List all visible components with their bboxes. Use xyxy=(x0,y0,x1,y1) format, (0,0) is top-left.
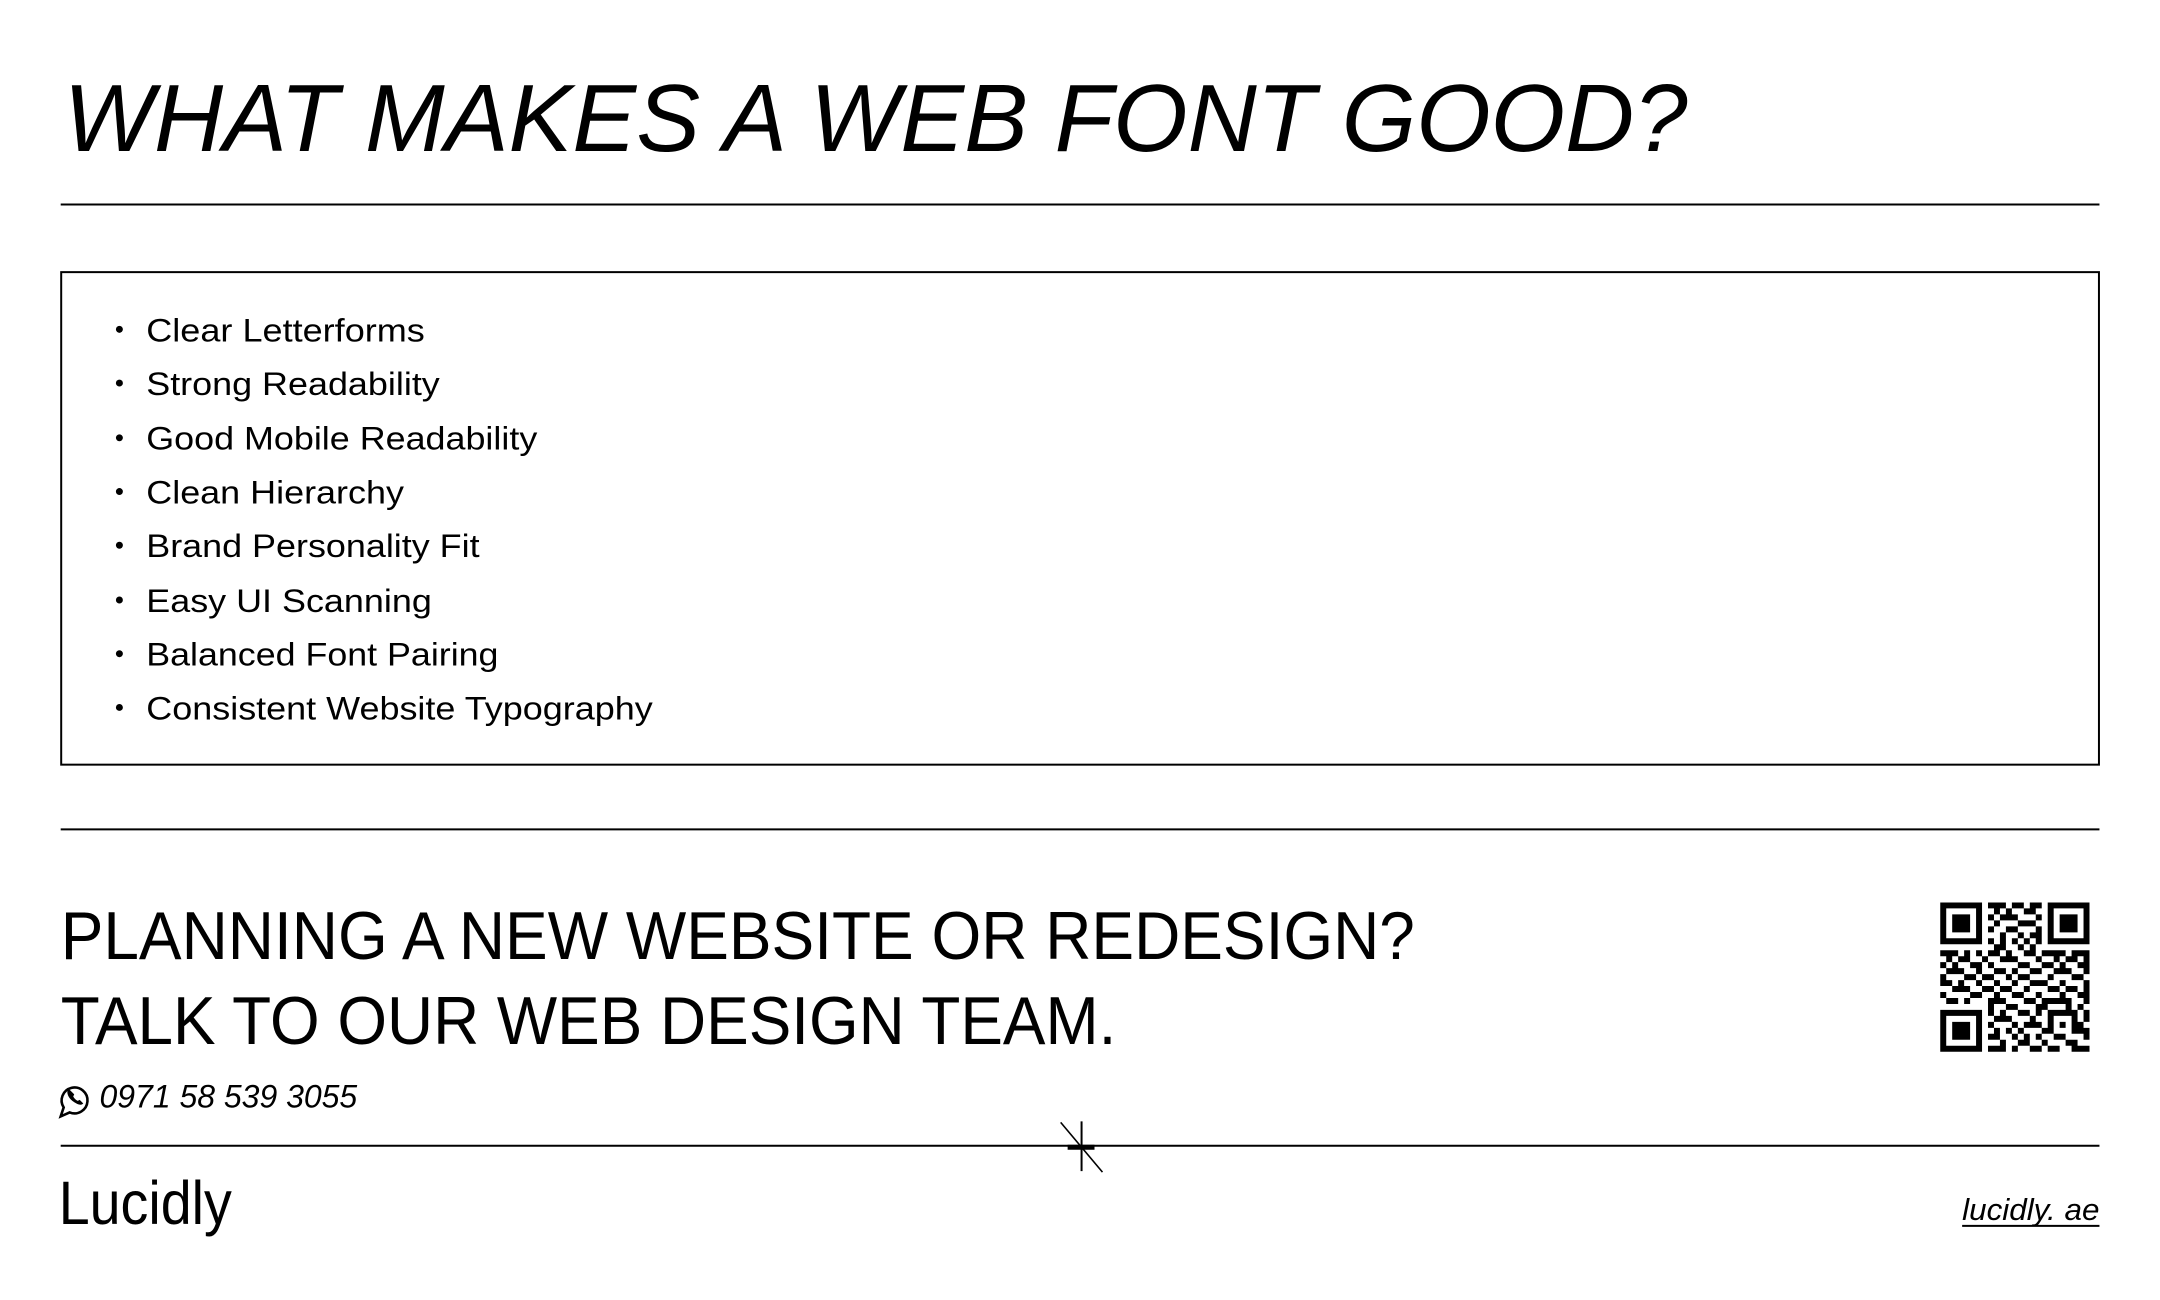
bullet list: Good Mobile Readability xyxy=(146,420,538,457)
bullet list: Consistent Website Typography xyxy=(146,689,653,726)
call to action heading: PLANNING A NEW WEBSITE OR REDESIGN? xyxy=(61,899,1415,974)
bullet list: Easy UI Scanning xyxy=(146,582,432,619)
bullet list: Clear Letterforms xyxy=(146,311,425,348)
logo: Lucidly: Lucidly xyxy=(59,1169,233,1237)
icon: cross marker xyxy=(1061,1121,1102,1172)
bullet list: Clean Hierarchy xyxy=(146,473,405,510)
bullet list xyxy=(116,311,653,726)
panel: qualities list xyxy=(61,272,2099,765)
title: WHAT MAKES A WEB FONT GOOD? xyxy=(64,66,1688,172)
website link: lucidly. ae xyxy=(1962,1192,2099,1227)
icon: whatsapp xyxy=(61,1088,87,1116)
call to action heading: TALK TO OUR WEB DESIGN TEAM. xyxy=(61,984,1116,1059)
bullet list: Brand Personality Fit xyxy=(146,527,480,564)
bullet list: Balanced Font Pairing xyxy=(146,636,498,673)
phone number: 0971 58 539 3055 xyxy=(100,1077,358,1114)
bullet list: Strong Readability xyxy=(146,365,440,402)
call to action heading xyxy=(61,899,1415,1059)
QR code xyxy=(1940,902,2090,1052)
